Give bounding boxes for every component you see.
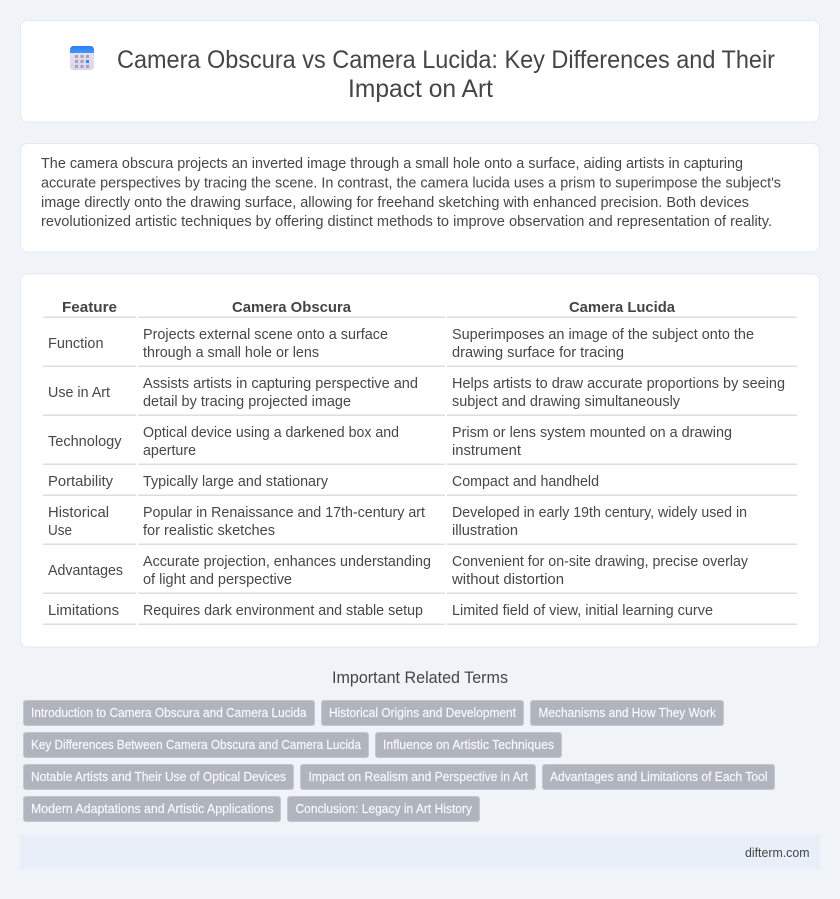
- table header: Feature: [62, 299, 117, 316]
- row: Limitations: Requires dark environment and stable setup: [143, 603, 423, 619]
- row: Function: Function: [48, 336, 104, 352]
- row: Advantages: Convenient for on-site drawing, precise overlay: [452, 554, 749, 570]
- row: Limitations: Limitations: [48, 603, 119, 619]
- footer: difterm.com: [745, 845, 810, 860]
- text block: introduction: revolutionized artistic techniques by offering distinct methods to improve observation and representation of reality.: [41, 214, 772, 230]
- tag: [24, 796, 280, 822]
- tag: [24, 764, 294, 790]
- title: Impact on Art: [348, 75, 493, 103]
- tag: [288, 796, 480, 822]
- text block: introduction: [41, 156, 781, 230]
- table header: [62, 299, 676, 316]
- row: Technology: [48, 425, 732, 459]
- row: Use in Art: Helps artists to draw accurate proportions by seeing: [452, 376, 785, 392]
- tag: Influence on Artistic Techniques: [383, 738, 554, 752]
- row: Function: drawing surface for tracing: [452, 345, 624, 361]
- row: Technology: Prism or lens system mounted on a drawing: [452, 425, 732, 441]
- row: Function: Superimposes an image of the subject onto the: [452, 327, 754, 343]
- tag: Key Differences Between Camera Obscura and Camera Lucida: [31, 738, 361, 752]
- title: Camera Obscura vs Camera Lucida: Key Differences and Their: [117, 46, 775, 74]
- row: Function: [48, 327, 754, 361]
- row: Use in Art: subject and drawing simultaneously: [452, 394, 681, 410]
- tag: [530, 700, 724, 726]
- tag: [24, 700, 314, 726]
- row: Function: through a small hole or lens: [143, 345, 319, 361]
- row: Portability: Compact and handheld: [452, 474, 599, 490]
- tag: Historical Origins and Development: [329, 706, 516, 720]
- row: Historical Use: Popular in Renaissance and 17th-century art: [143, 505, 425, 521]
- row: Limitations: [48, 603, 713, 619]
- tag: Conclusion: Legacy in Art History: [296, 802, 473, 816]
- panel: comparison table: [20, 274, 820, 647]
- tag: Notable Artists and Their Use of Optical Devices: [31, 770, 286, 784]
- row: Historical Use: illustration: [452, 523, 518, 539]
- row: Use in Art: Use in Art: [48, 385, 110, 401]
- row: Technology: Technology: [48, 434, 122, 450]
- row: Technology: instrument: [452, 443, 521, 459]
- row: Function: Projects external scene onto a surface: [143, 327, 388, 343]
- row: Historical Use: Developed in early 19th century, widely used in: [452, 505, 747, 521]
- row: Advantages: of light and perspective: [143, 572, 292, 588]
- text block: introduction: image directly onto the drawing surface, allowing for freehand sketching with enhanced precision. Both devices: [41, 195, 749, 211]
- heading: related terms: Important Related Terms: [332, 669, 508, 687]
- panel: header: [20, 20, 820, 122]
- row: Advantages: Advantages: [48, 563, 123, 579]
- tag: Mechanisms and How They Work: [538, 706, 717, 720]
- footer: [20, 835, 820, 869]
- row: Use in Art: [48, 376, 785, 410]
- row: Limitations: Limited field of view, initial learning curve: [452, 603, 713, 619]
- tag: [542, 764, 774, 790]
- tag: Impact on Realism and Perspective in Art: [308, 770, 528, 784]
- row: Historical Use: [48, 505, 747, 539]
- tag: [376, 732, 562, 758]
- tag: [322, 700, 524, 726]
- text block: introduction: accurate perspectives by tracing the scene. In contrast, the camera lucida uses a prism to superimpose the subject's: [41, 176, 781, 192]
- tag: [24, 732, 368, 758]
- icon: calendar: [70, 46, 94, 70]
- row: Use in Art: Assists artists in capturing perspective and: [143, 376, 418, 392]
- text block: introduction: The camera obscura projects an inverted image through a small hole onto a surface, aiding artists in capturing: [41, 156, 743, 172]
- tag: Introduction to Camera Obscura and Camera Lucida: [31, 706, 306, 720]
- title: [117, 46, 775, 103]
- tag: Modern Adaptations and Artistic Applications: [31, 802, 274, 816]
- table header: Camera Obscura: [232, 299, 352, 316]
- panel: related term tags: [24, 700, 774, 822]
- row: Technology: Optical device using a darkened box and: [143, 425, 399, 441]
- row: Historical Use: Historical: [48, 505, 109, 521]
- row: Historical Use: Use: [48, 523, 72, 539]
- row: Portability: Portability: [48, 474, 114, 490]
- row: Technology: aperture: [143, 443, 196, 459]
- row: Historical Use: for realistic sketches: [143, 523, 275, 539]
- tag: Advantages and Limitations of Each Tool: [550, 770, 768, 784]
- row: Portability: Typically large and stationary: [143, 474, 329, 490]
- tag: [300, 764, 536, 790]
- table header: Camera Lucida: [569, 299, 676, 316]
- row: Advantages: [48, 554, 749, 588]
- panel: introduction: [20, 144, 820, 252]
- row: Advantages: without distortion: [451, 572, 564, 588]
- row: Portability: [48, 474, 599, 490]
- row: Advantages: Accurate projection, enhances understanding: [143, 554, 431, 570]
- row: Use in Art: detail by tracing projected image: [143, 394, 351, 410]
